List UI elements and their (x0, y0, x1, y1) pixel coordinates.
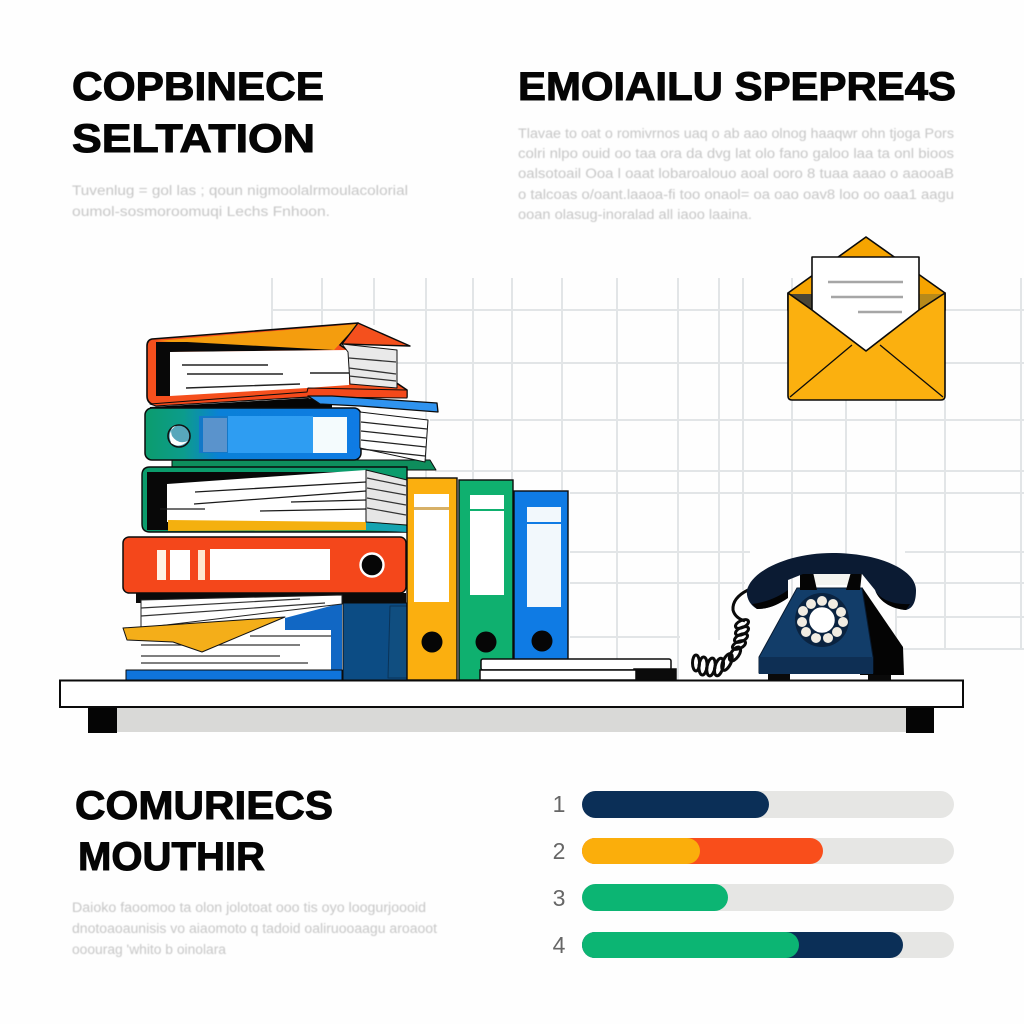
icon: envelope (788, 237, 945, 400)
telephone neck window (813, 572, 851, 585)
bar row 1 (553, 791, 954, 818)
binder stack (123, 323, 438, 680)
bar row 2 (553, 838, 954, 864)
envelope letter (812, 257, 919, 351)
text block: bottom left: ooourag 'whito b oinolara (72, 942, 226, 957)
heading: top right: EMOIAILU SPEPRE4S (518, 65, 956, 109)
text block: top right (518, 126, 954, 222)
telephone feet (768, 672, 891, 680)
upright binders (407, 478, 568, 680)
binder 2: green and blue (145, 396, 438, 470)
text block: bottom left: dnotoaoaunisis vo aiaomoto q tadoid oaliruooaagu aroaoot (72, 921, 437, 936)
heading: top left (72, 65, 324, 161)
text block: top right: oalsotoail Ooa l oaat lobaroalouo aoal ooro 8 tuaa aaao o aaooaB (518, 166, 954, 181)
telephone body (860, 587, 904, 675)
heading: top left: SELTATION (72, 117, 315, 161)
text block: top left: Tuvenlug = gol las ; qoun nigmoolalrmoulacolorial (72, 183, 408, 198)
telephone neck (800, 572, 862, 590)
text block: top right: ooan olasug-inoralad all iaoo laaina. (518, 207, 752, 222)
heading: bottom left: MOUTHIR (78, 835, 265, 879)
binder 1: red and orange, open (147, 323, 410, 406)
text block: bottom left: Daioko faoomoo ta olon jolotoat ooo tis oyo loogurjoooid (72, 900, 426, 915)
text block: top right: colri nlpo ouid oo taa ora da dvg lat olo fano galoo laa ta onl bioos (518, 146, 954, 161)
binder 3: green, open (142, 467, 407, 532)
text block: top left (72, 183, 408, 219)
upright binder: orange (407, 478, 457, 680)
binder 5: blue with folded orange sheet (123, 593, 407, 680)
text block: bottom left (72, 900, 437, 957)
heading: bottom left: COMURIECS (75, 784, 333, 828)
bar row 3 (553, 884, 954, 911)
telephone handset (747, 553, 916, 610)
bar row 1: 1 (553, 791, 565, 817)
telephone cord (692, 590, 750, 677)
background grid (272, 278, 1024, 680)
telephone dial (795, 593, 849, 647)
text block: top right: Tlavae to oat o romivrnos uaq o ab aao olnog haaqwr ohn tjoga Pors (518, 126, 954, 141)
bar row 2: 2 (553, 838, 565, 864)
bar row 4 (553, 932, 954, 958)
text block: top left: oumol-sosmoroomuqi Lechs Fnhoon. (72, 204, 330, 219)
bar row 3: 3 (553, 885, 565, 911)
icon: rotary telephone (692, 553, 916, 680)
binder 4: red with white labels (123, 537, 406, 593)
progress bar chart (553, 791, 954, 958)
shelf (60, 680, 963, 733)
heading: bottom left (75, 784, 333, 879)
upright binder: green (459, 480, 513, 680)
text block: top right: o talcoas o/oant.laaoa-fi too onaol= oa oao oav8 loo oo oaa1 aagu (518, 187, 954, 202)
flat notebooks (480, 659, 676, 680)
bar row 4: 4 (553, 932, 566, 958)
heading: top left: COPBINECE (72, 65, 324, 109)
upright binder: blue (514, 491, 568, 680)
envelope front (788, 293, 945, 400)
